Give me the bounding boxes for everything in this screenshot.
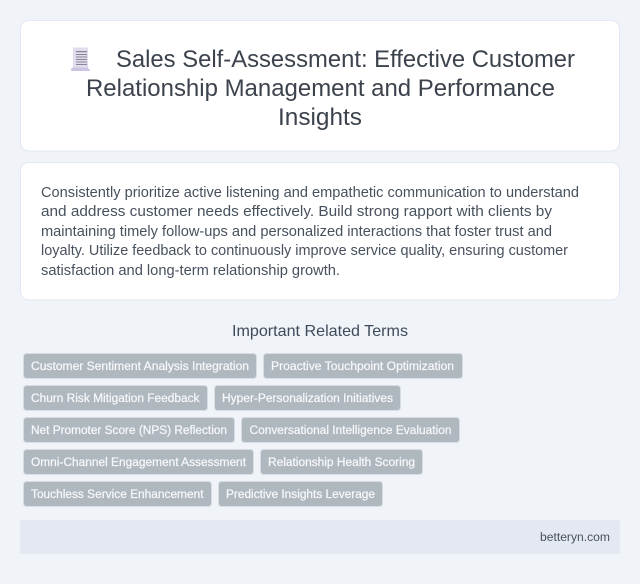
- title: [86, 46, 575, 131]
- tag: [24, 450, 254, 474]
- panel: title card: [20, 20, 620, 151]
- text block: summary: Consistently prioritize active listening and empathetic communication to understand: [41, 185, 579, 201]
- tag: [264, 354, 462, 378]
- tag: [24, 354, 256, 378]
- panel: summary card: [20, 162, 620, 300]
- heading: important related terms: Important Related Terms: [232, 323, 408, 340]
- tag: Conversational Intelligence Evaluation: [250, 423, 452, 437]
- tag: Touchless Service Enhancement: [31, 487, 204, 501]
- footer: [20, 520, 620, 554]
- text block: summary: [41, 185, 579, 279]
- tag: [242, 418, 460, 442]
- tag: Predictive Insights Leverage: [226, 487, 375, 501]
- tag: Proactive Touchpoint Optimization: [271, 359, 454, 373]
- icon: receipt scroll: [71, 48, 90, 71]
- tag: Churn Risk Mitigation Feedback: [31, 391, 200, 405]
- tag: [214, 386, 400, 410]
- tag: [218, 482, 382, 506]
- tag: [260, 450, 422, 474]
- tag: [24, 386, 208, 410]
- text block: summary: loyalty. Utilize feedback to continuously improve service quality, ensuring customer: [41, 243, 568, 259]
- tag: [24, 418, 234, 442]
- title: Relationship Management and Performance: [86, 75, 555, 102]
- text block: summary: maintaining timely follow-ups and personalized interactions that foster trust and: [41, 224, 552, 240]
- tag: [24, 482, 212, 506]
- footer: betteryn.com: [540, 530, 610, 544]
- tag: Relationship Health Scoring: [268, 455, 415, 469]
- tag: Customer Sentiment Analysis Integration: [31, 359, 249, 373]
- text block: summary: and address customer needs effectively. Build strong rapport with clients by: [41, 204, 553, 220]
- tag: Omni-Channel Engagement Assessment: [31, 455, 247, 469]
- title: Sales Self-Assessment: Effective Customer: [116, 46, 575, 73]
- tags: related terms: [24, 354, 462, 506]
- title: Insights: [278, 104, 362, 131]
- tag: Hyper-Personalization Initiatives: [222, 391, 393, 405]
- text block: summary: satisfaction and long-term relationship growth.: [41, 263, 340, 279]
- tag: Net Promoter Score (NPS) Reflection: [31, 423, 227, 437]
